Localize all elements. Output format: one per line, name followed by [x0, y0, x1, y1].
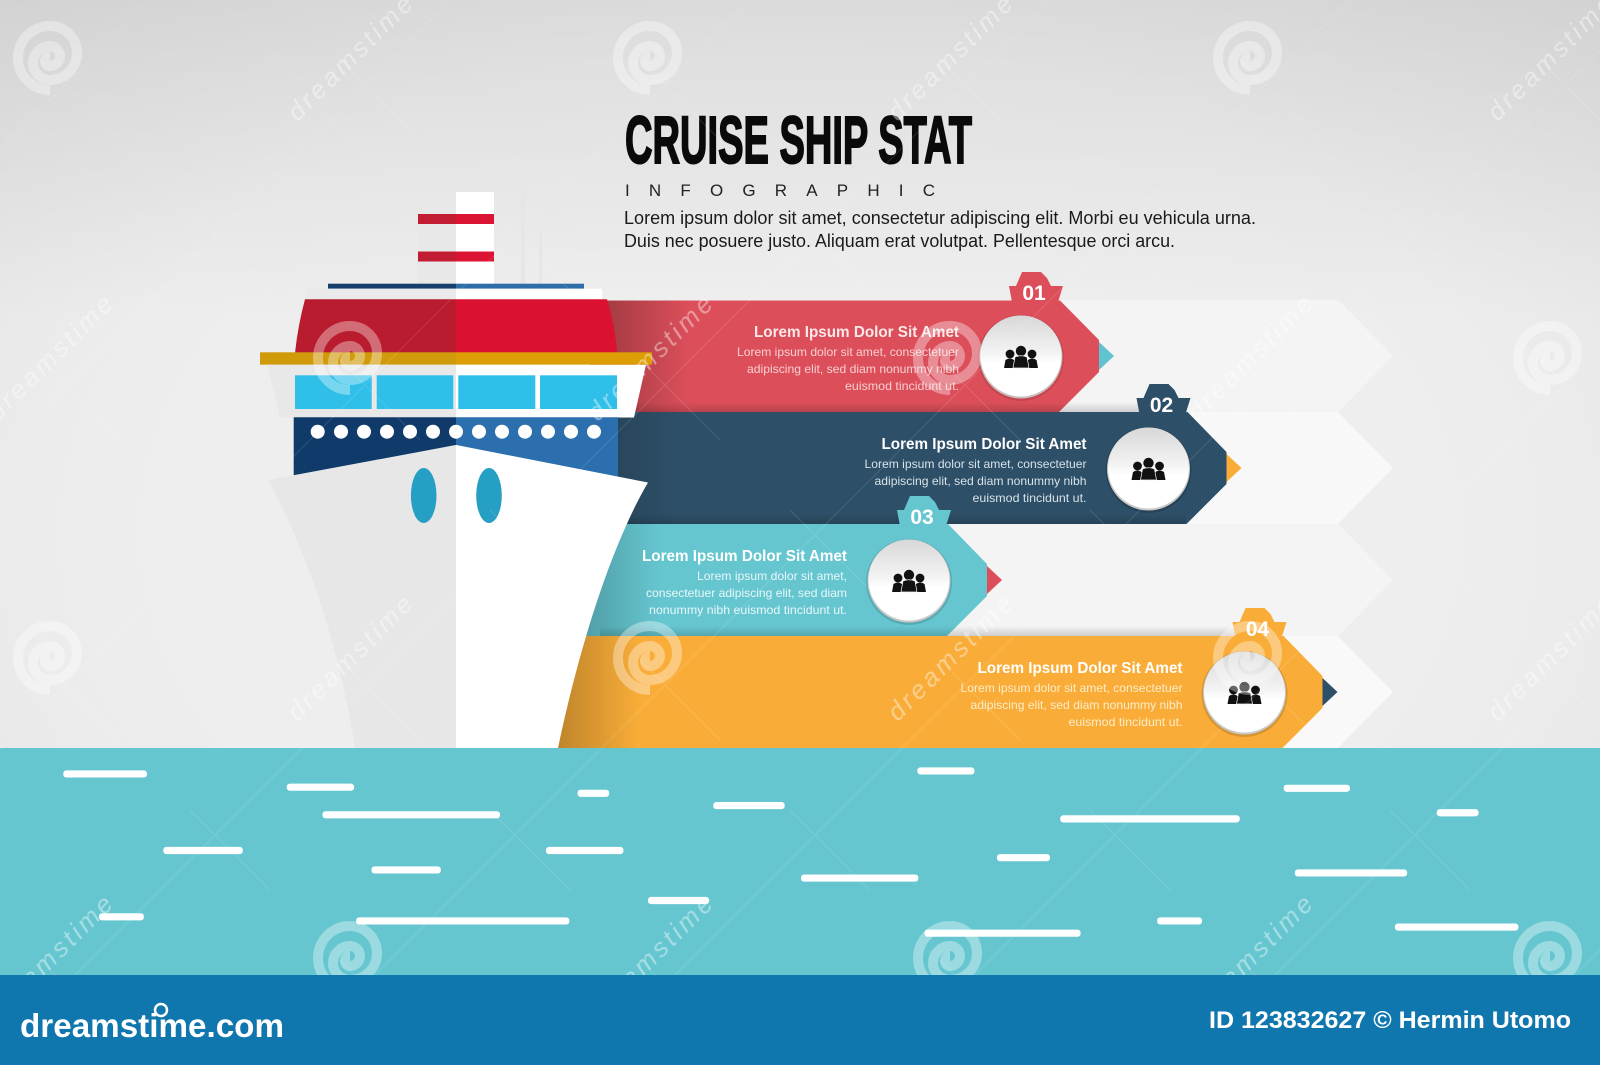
body 03: Lorem ipsum dolor sit amet, — [697, 569, 847, 583]
arrow body 01 — [590, 300, 1099, 412]
icon disc 02 — [1106, 427, 1192, 513]
left shade 03 — [570, 524, 660, 636]
body 04: adipiscing elit, sed diam nonummy nibh — [970, 698, 1182, 712]
stat bar 02 — [597, 384, 1242, 524]
subtitle: INFOGRAPHIC — [625, 181, 935, 200]
white window deck — [267, 365, 646, 418]
heading 02: Lorem Ipsum Dolor Sit Amet — [882, 436, 1086, 453]
body 02 — [864, 457, 1086, 505]
footer bar — [0, 975, 1600, 1065]
footer credit: ID 123832627 © Hermin Utomo — [1209, 1007, 1571, 1034]
title: CRUISE SHIP STAT — [625, 103, 972, 178]
gold rail — [260, 352, 652, 365]
body 01: Lorem ipsum dolor sit amet, consectetuer — [737, 345, 959, 359]
top rail — [306, 284, 602, 300]
heading 01: Lorem Ipsum Dolor Sit Amet — [754, 324, 959, 341]
stat bar 04 — [550, 608, 1338, 748]
hull — [268, 445, 648, 748]
intro text: Lorem ipsum dolor sit amet, consectetur adipiscing elit. Morbi eu vehicula urna. — [624, 208, 1256, 228]
footer logo: dreamstime.com — [20, 1007, 284, 1044]
body 01: adipiscing elit, sed diam nonummy nibh — [747, 362, 959, 376]
masts — [521, 182, 542, 284]
body 04 — [960, 681, 1182, 729]
badge 02 — [1136, 384, 1190, 414]
heading 03: Lorem Ipsum Dolor Sit Amet — [642, 548, 847, 565]
left shade 02 — [597, 412, 677, 524]
icon disc 04 — [1202, 651, 1288, 737]
number 04: 04 — [1246, 618, 1269, 641]
body 03: nonummy nibh euismod tincidunt ut. — [649, 603, 847, 617]
cruise ship — [260, 182, 652, 748]
sea — [0, 748, 1600, 976]
bridge windows — [295, 375, 617, 409]
pale arrow bands — [600, 300, 1393, 748]
watermark overlay: dreamstime — [1181, 289, 1319, 427]
funnel — [418, 192, 494, 284]
badge 04 — [1232, 608, 1286, 638]
watermark overlay: dreamstime — [881, 589, 1019, 727]
intro text — [624, 208, 1256, 251]
arrow body 02 — [597, 412, 1226, 524]
body 02: adipiscing elit, sed diam nonummy nibh — [874, 474, 1086, 488]
blue hull band — [294, 417, 618, 477]
body 03 — [646, 569, 847, 617]
icon disc 03 — [866, 539, 952, 625]
body 02: Lorem ipsum dolor sit amet, consectetuer — [864, 457, 1086, 471]
arrow body 04 — [550, 636, 1322, 748]
stat bar 03 — [570, 496, 1002, 636]
body 03: consectetuer adipiscing elit, sed diam — [646, 586, 847, 600]
body 04: euismod tincidunt ut. — [1068, 715, 1182, 729]
watermark overlay: dreamstime — [1181, 889, 1319, 1027]
icon disc 01 — [978, 315, 1064, 401]
heading 04: Lorem Ipsum Dolor Sit Amet — [978, 660, 1182, 677]
arrow tip 03 — [987, 566, 1002, 594]
row shadow 2 — [600, 514, 1186, 524]
watermark overlay: dreamstime — [581, 889, 719, 1027]
left shade 04 — [550, 636, 640, 748]
number 03: 03 — [910, 506, 934, 529]
portholes — [311, 425, 601, 439]
arrow tip 04 — [1322, 678, 1338, 706]
left shade 01 — [590, 300, 690, 412]
arrow tip 02 — [1226, 454, 1242, 482]
arrow tip 01 — [1099, 342, 1114, 370]
badge 03 — [897, 496, 951, 526]
stat bar 01 — [590, 272, 1114, 412]
red upper deck — [295, 299, 617, 353]
number 01: 01 — [1022, 282, 1046, 305]
waves — [63, 767, 1518, 937]
arrow body 03 — [570, 524, 987, 636]
body 02: euismod tincidunt ut. — [972, 491, 1086, 505]
anchor ovals — [411, 468, 502, 523]
watermark overlay: dreamstime — [581, 289, 719, 427]
watermark overlay: dreamstime — [281, 589, 419, 727]
intro text: Duis nec posuere justo. Aliquam erat volutpat. Pellentesque orci arcu. — [624, 231, 1175, 251]
number 02: 02 — [1150, 394, 1173, 417]
body 01: euismod tincidunt ut. — [845, 379, 959, 393]
badge 01 — [1009, 272, 1063, 302]
body 01 — [737, 345, 959, 393]
body 04: Lorem ipsum dolor sit amet, consectetuer — [960, 681, 1182, 695]
row shadow 1 — [600, 402, 1150, 412]
row shadow 3 — [600, 626, 1245, 636]
